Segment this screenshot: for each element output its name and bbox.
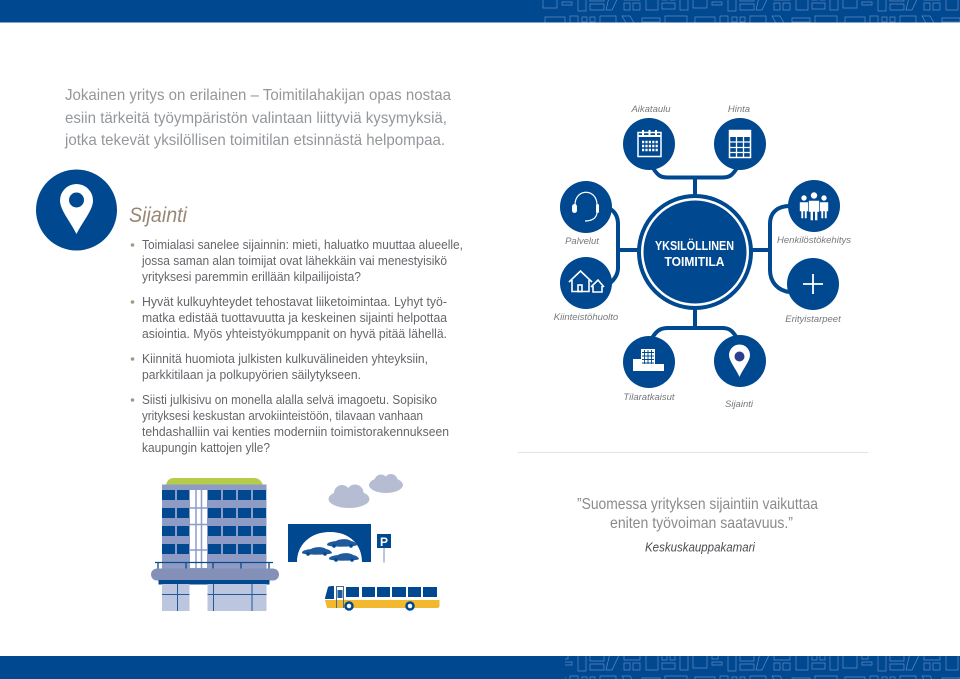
bullet 4: tehdashalliin vai kenties moderniin toimistorakennukseen — [142, 424, 449, 439]
bullet 4 — [131, 392, 449, 455]
bullet 1: Toimialasi sanelee sijainnin: mieti, haluatko muuttaa alueelle, — [142, 237, 463, 252]
heading: Sijainti — [129, 204, 188, 227]
node: Tilaratkaisut — [623, 336, 675, 403]
node: Sijainti — [714, 335, 766, 410]
intro text: esiin tärkeitä työympäristön valintaan liittyviä kysymyksiä, — [65, 110, 447, 127]
node: Hinta: Hinta — [728, 104, 750, 115]
node: Palvelut — [560, 181, 612, 247]
node: Palvelut: Palvelut — [565, 236, 599, 247]
diagram — [554, 104, 851, 410]
bullet 2: matka edistää tuottavuutta ja keskeinen sijainti helpottaa — [142, 310, 448, 325]
node: Henkilöstökehitys: Henkilöstökehitys — [777, 235, 851, 246]
node: Tilaratkaisut: Tilaratkaisut — [623, 392, 675, 403]
node: Henkilöstökehitys — [777, 180, 851, 246]
intro text: Jokainen yritys on erilainen – Toimitilahakijan opas nostaa — [65, 87, 451, 104]
bullet list — [131, 237, 463, 455]
bullet 3: Kiinnitä huomiota julkisten kulkuvälineiden yhteyksiin, — [142, 351, 428, 366]
bullet 2: Hyvät kulkuyhteydet tehostavat liiketoimintaa. Lyhyt työ- — [142, 294, 447, 309]
top band — [0, 0, 960, 22]
quote: ”Suomessa yrityksen sijaintiin vaikuttaa — [577, 496, 818, 513]
bullet 4: yrityksesi keskustan arvokiinteistöön, tilavaan vanhaan — [142, 408, 423, 423]
illustration: clouds — [328, 474, 403, 508]
illustration: parking garage with cars — [288, 524, 391, 562]
divider — [518, 452, 868, 453]
center node: TOIMITILA — [664, 255, 724, 269]
node: Aikataulu: Aikataulu — [630, 104, 671, 115]
node: Hinta — [714, 104, 766, 170]
icon: parking sign: P — [380, 535, 388, 549]
bottom band — [0, 656, 960, 679]
bullet 4: Siisti julkisivu on monella alalla selvä imagoetu. Sopisiko — [142, 392, 437, 407]
bullet 2 — [131, 294, 448, 341]
intro text: jotka tekevät yksilöllisen toimitilan etsinnästä helpompaa. — [64, 132, 445, 149]
quote — [577, 496, 818, 554]
center node: YKSILÖLLINEN — [655, 238, 734, 253]
quote: eniten työvoiman saatavuus.” — [610, 515, 793, 532]
intro text — [64, 87, 451, 149]
illustration: bus — [325, 586, 440, 610]
bullet 2: asiointia. Myös yhteistyökumppanit on hyvä pitää lähellä. — [142, 326, 447, 341]
quote source: Keskuskauppakamari — [645, 540, 756, 554]
node: Kiinteistöhuolto: Kiinteistöhuolto — [554, 312, 618, 323]
node: Kiinteistöhuolto — [554, 257, 618, 323]
bullet 3 — [131, 351, 428, 382]
bullet 1 — [131, 237, 463, 284]
center node — [639, 196, 751, 308]
connectors — [608, 168, 790, 338]
bullet 3: parkkitilaan ja polkupyörien säilytykseen. — [142, 367, 361, 382]
node: Erityistarpeet — [785, 258, 841, 325]
bullet 1: yrityksesi paremmin erillään kilpailijoista? — [142, 269, 361, 284]
bullet 1: jossa saman alan toimijat ovat lähekkäin vai menestyisikö — [141, 253, 447, 268]
icon: location pin badge — [36, 170, 117, 250]
node: Erityistarpeet: Erityistarpeet — [785, 314, 841, 325]
illustration: office building — [151, 478, 279, 611]
node: Sijainti: Sijainti — [725, 399, 754, 410]
node: Aikataulu — [623, 104, 675, 170]
bullet 4: kaupungin kattojen ylle? — [142, 440, 270, 455]
